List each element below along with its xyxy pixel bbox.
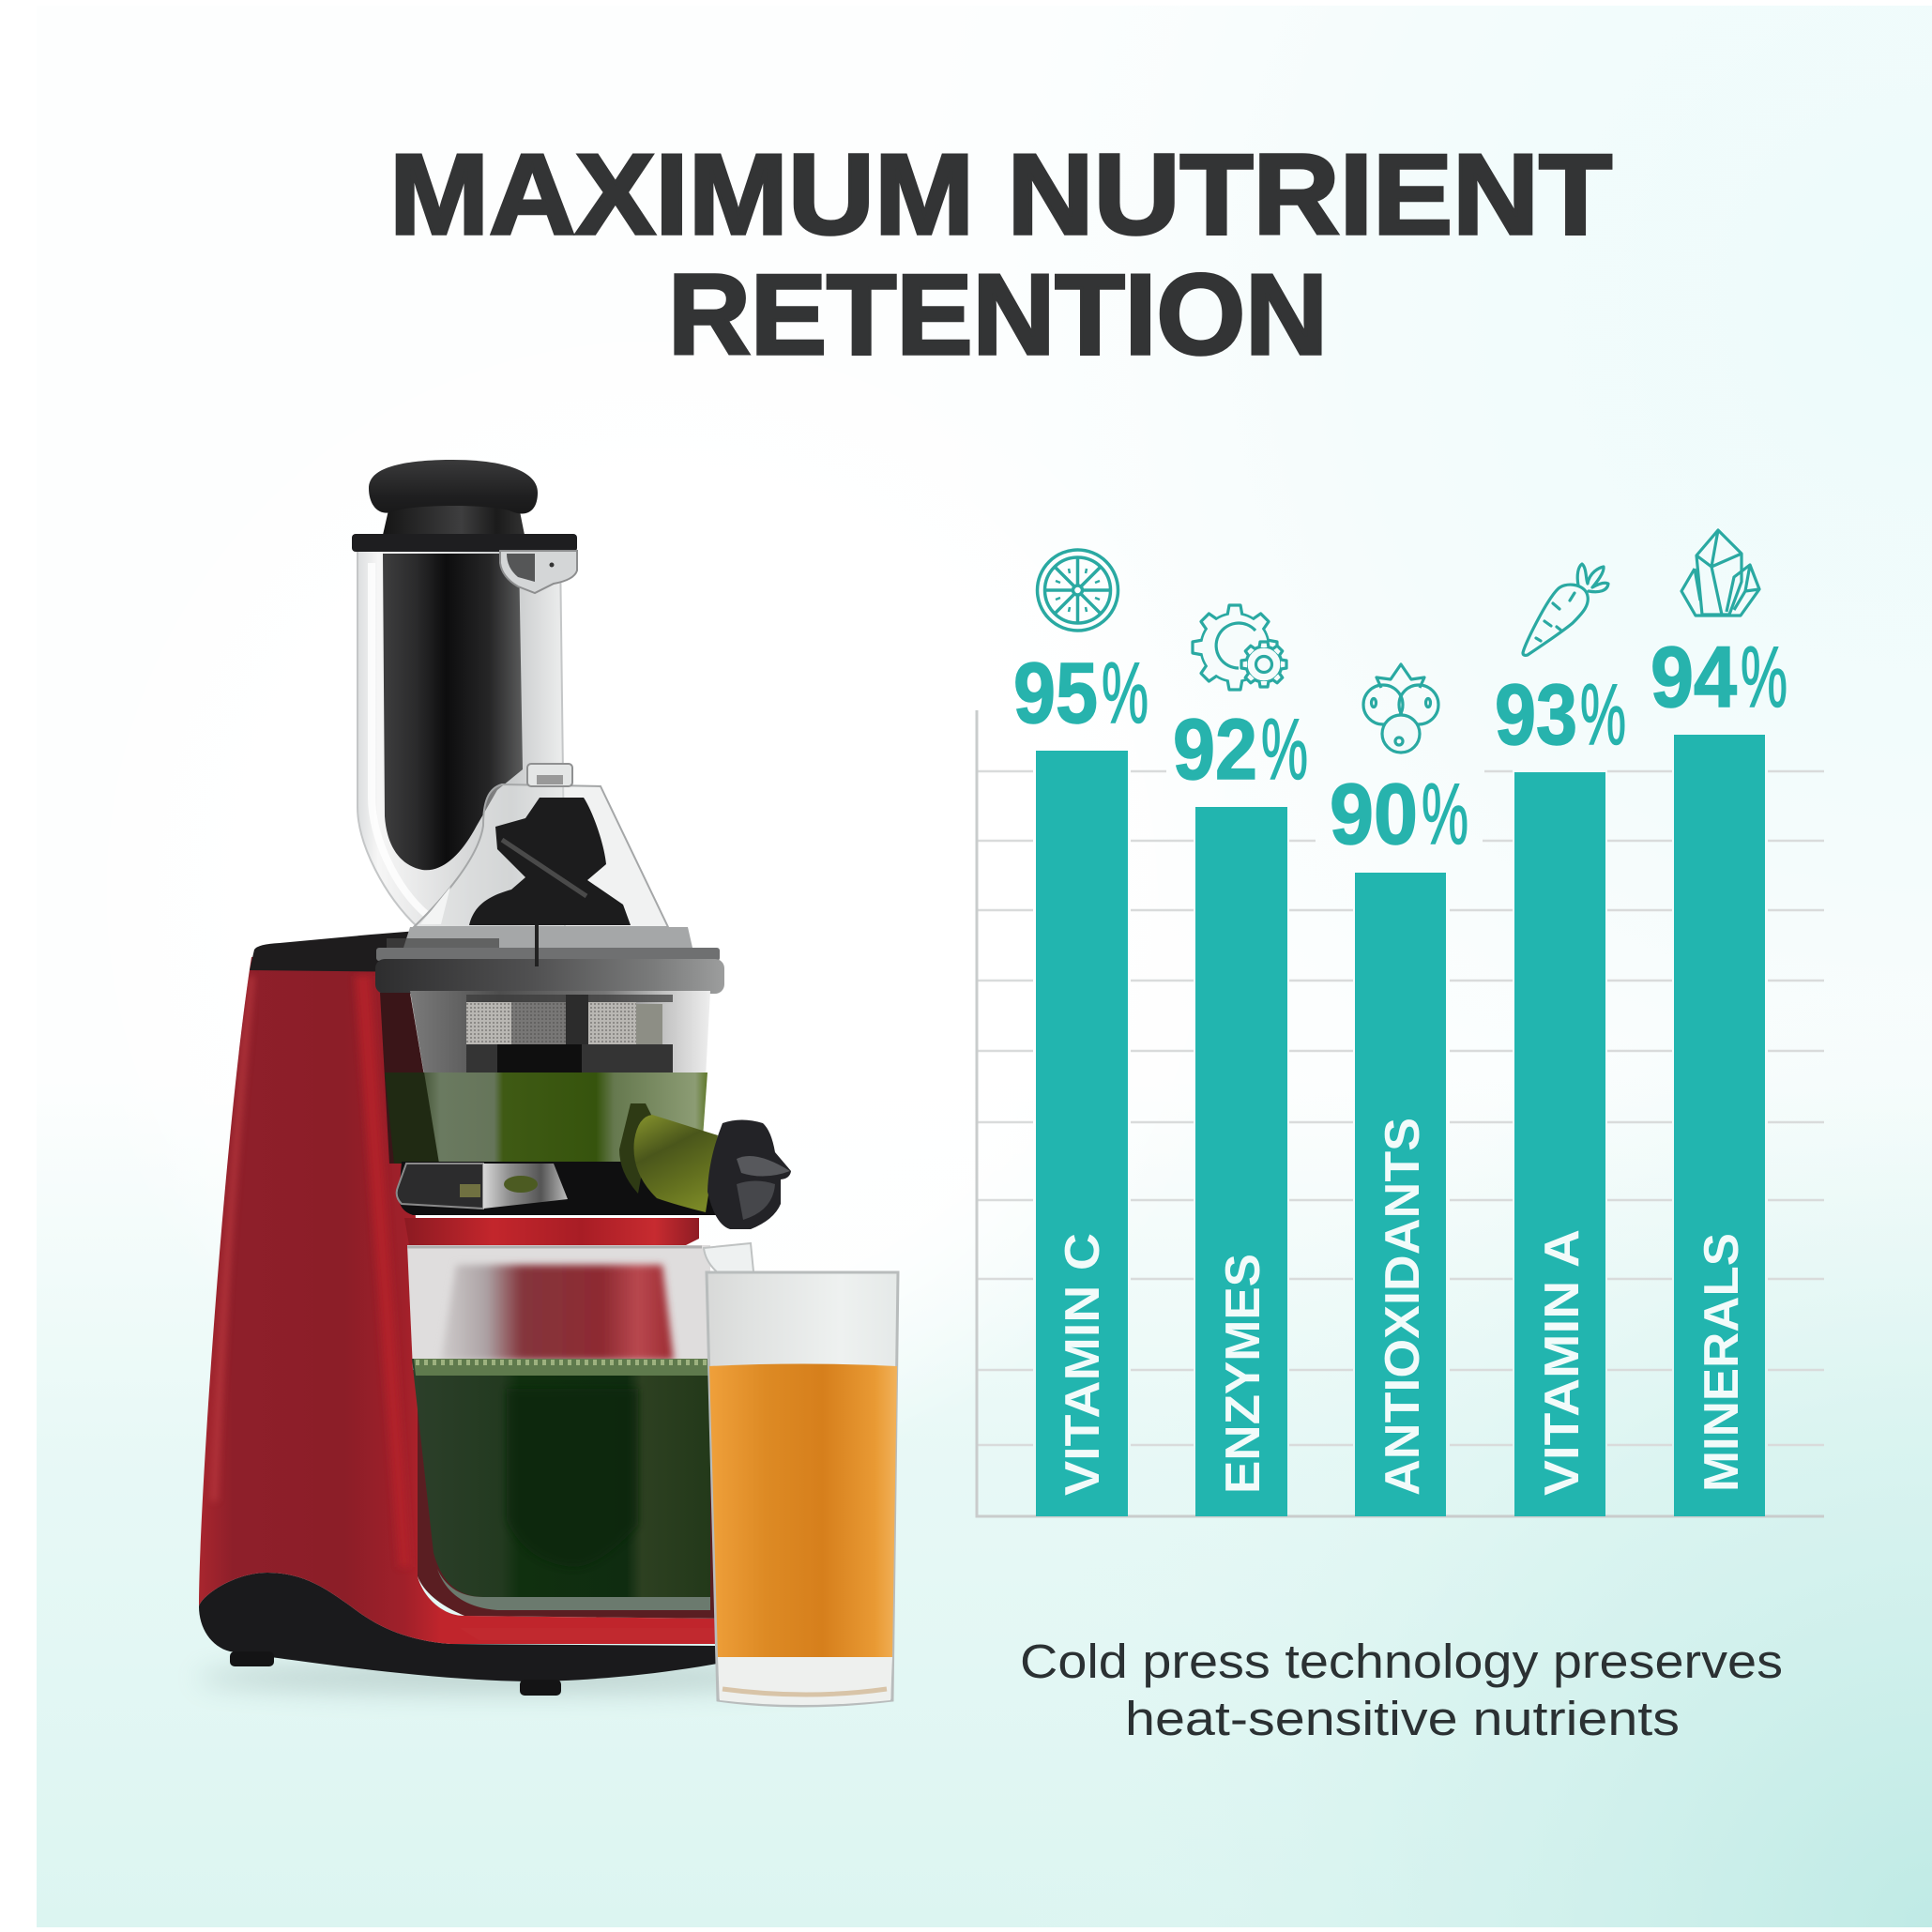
bar: Enzymes [1195,807,1287,1516]
percentage values: % [1102,646,1149,741]
feed chute: clear tube [357,549,565,927]
percentage values: 94 [1651,630,1737,725]
percentage values: % [1261,702,1308,798]
bar: Vitamin C: VITAMIN C [1056,1233,1110,1496]
auger [469,798,631,925]
icon: gears [1193,605,1286,690]
juice pitcher [407,1243,754,1619]
percentage values [1013,630,1787,862]
percentage values: 93 [1495,667,1577,763]
percentage values: % [1422,767,1468,862]
bar: Minerals: MINERALS [1695,1233,1749,1492]
percentage values: % [1741,630,1787,725]
bar: Antioxidants: ANTIOXIDANTS [1376,1118,1430,1496]
percentage values: 92 [1173,702,1257,798]
juicer red body [199,957,718,1644]
hopper clear tab [500,551,577,593]
hopper rim [352,534,577,552]
spout cap [707,1120,791,1229]
pitcher glass [407,1245,710,1370]
pitcher green juice [412,1359,710,1597]
percentage values: % [1580,667,1626,763]
bar: Vitamin A: VITAMIN A [1535,1229,1590,1496]
bar: Enzymes: ENZYMES [1216,1254,1270,1494]
strained bowl [380,991,710,1164]
dark juicer waist [399,1162,723,1215]
bar: Antioxidants [1355,873,1446,1516]
ground shadow [197,1663,816,1693]
food pusher [383,554,523,870]
icon: berries [1363,664,1438,753]
juicer black top panel [250,931,418,972]
bar: Minerals [1674,735,1765,1516]
juice spout [619,1103,718,1212]
grid lines and axes [977,710,1824,1516]
title: RETENTION [668,251,1328,378]
title [389,130,1612,378]
green juice in bowl [410,1072,707,1164]
caption: Cold press technology preserves [1020,1635,1783,1688]
icon: crystals [1681,530,1759,616]
bar: Vitamin A [1514,772,1605,1516]
pusher knob [369,460,538,535]
strainer mesh [466,995,673,1072]
title: MAXIMUM NUTRIENT [389,130,1612,258]
juicer base [199,1573,723,1696]
pitcher interior behind juice [418,1351,723,1619]
glass of orange juice [707,1272,898,1706]
bar: Vitamin C [1036,751,1128,1516]
icon: citrus slice [1038,550,1118,631]
product: cold press juicer with glass [197,460,898,1706]
icon: carrot [1523,564,1608,655]
bar chart [977,710,1824,1516]
lid [375,925,724,994]
percentage values: 95 [1013,646,1098,741]
percentage values: 90 [1330,767,1418,862]
red collar [404,1218,699,1245]
foam [414,1359,710,1376]
clear auger dome [414,764,668,927]
chrome pulp chute [397,1164,568,1209]
caption [1020,1635,1783,1745]
caption: heat-sensitive nutrients [1125,1692,1680,1745]
